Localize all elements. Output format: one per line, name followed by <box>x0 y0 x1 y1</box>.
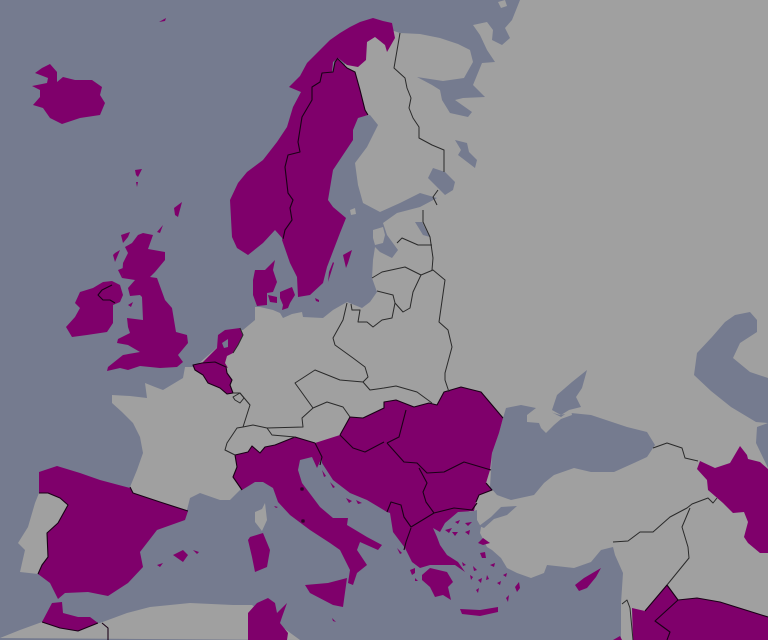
highlighted country: Denmark <box>253 260 295 310</box>
border: Turkey and Georgia <box>653 443 698 461</box>
sea: Sea of Marmara <box>479 506 517 528</box>
sea: Caspian Sea <box>694 312 768 468</box>
border: Greece <box>387 502 477 550</box>
highlighted islands: Aegean, Ionian and Adriatic <box>322 470 520 616</box>
highlighted country: Italy <box>233 437 382 622</box>
border: Latvia, Lithuania and Belarus <box>372 267 452 392</box>
border: Hungary <box>340 410 406 452</box>
highlighted countries: Jordan and Saudi Arabia <box>613 585 768 640</box>
border: Switzerland and France <box>225 427 295 455</box>
highlighted country: Cyprus <box>575 568 601 591</box>
border: France and Germany <box>233 393 250 427</box>
border: Netherlands and Germany <box>233 328 243 353</box>
border: Estonia and Latvia <box>397 238 432 245</box>
border: Norway and Sweden <box>283 58 338 239</box>
border: Netherlands and Belgium <box>193 362 233 394</box>
highlighted islands: Balearics <box>157 550 199 567</box>
border: Poland north <box>351 303 395 327</box>
microstates: San Marino and Vatican <box>301 488 304 522</box>
highlighted islands: Sardinia, Sicily, Malta <box>248 506 347 622</box>
border: Turkey and Syria <box>613 498 717 542</box>
highlighted country: Ireland <box>66 281 123 337</box>
border: Spain and Portugal <box>38 493 68 574</box>
highlighted region: Hungary, Romania, Bulgaria, western Balkans and Greece <box>315 387 520 616</box>
border: Jordan <box>630 608 633 640</box>
highlighted country: Spain <box>38 466 188 599</box>
border: Serbia and Bulgaria <box>419 468 434 513</box>
land: Crimea <box>527 405 572 433</box>
inland seas: Black Sea and Marmara <box>479 370 655 528</box>
lakes: Ladoga, Onega, Peipus <box>415 140 477 237</box>
highlighted country: Egypt <box>613 636 622 640</box>
land: North Africa <box>0 603 300 640</box>
outer border: Romania and Bulgaria <box>340 387 503 502</box>
border: France and Italy <box>233 437 315 490</box>
border: Sweden and Finland <box>338 59 368 115</box>
border: Northern Ireland <box>98 285 115 303</box>
border: Luxembourg <box>233 393 244 403</box>
border: Czechia and Slovakia north <box>295 370 432 408</box>
land: Portugal <box>18 493 68 574</box>
land: Corsica <box>255 503 267 531</box>
border: Romania and Bulgaria <box>387 443 491 473</box>
border: Germany and Austria <box>243 402 350 428</box>
border: Spain and France <box>130 487 188 511</box>
border: Finland and Russia <box>394 33 444 270</box>
sea: Sea of Azov <box>552 370 587 415</box>
border: Syria and Iraq <box>667 508 690 585</box>
highlighted country: Tunisia <box>248 598 288 640</box>
highlighted country: Great Britain <box>107 233 188 371</box>
border: Germany and Poland <box>333 303 368 382</box>
sea: Black Sea <box>490 405 655 500</box>
highlighted country: Iceland <box>32 64 105 124</box>
highlighted islands: Gotland, Oland, Bornholm <box>315 250 352 302</box>
highlighted country: Morocco <box>42 602 98 631</box>
border: Israel <box>622 600 630 608</box>
highlighted countries: Netherlands and Belgium <box>193 328 243 394</box>
highlighted countries: Norway <box>230 18 395 255</box>
land: Baltic islands <box>350 0 507 245</box>
border: Morocco and Algeria <box>42 622 108 640</box>
highlighted country: Iran <box>697 446 768 553</box>
highlighted country: Sweden <box>282 58 368 297</box>
border: Italy and Slovenia <box>315 443 322 465</box>
border: Lithuania <box>377 275 421 312</box>
highlighted islands: Jan Mayen, Faroes, Shetland, Orkney, Hebrides, Man <box>113 18 182 307</box>
highlighted country: Peloponnese <box>422 568 453 600</box>
